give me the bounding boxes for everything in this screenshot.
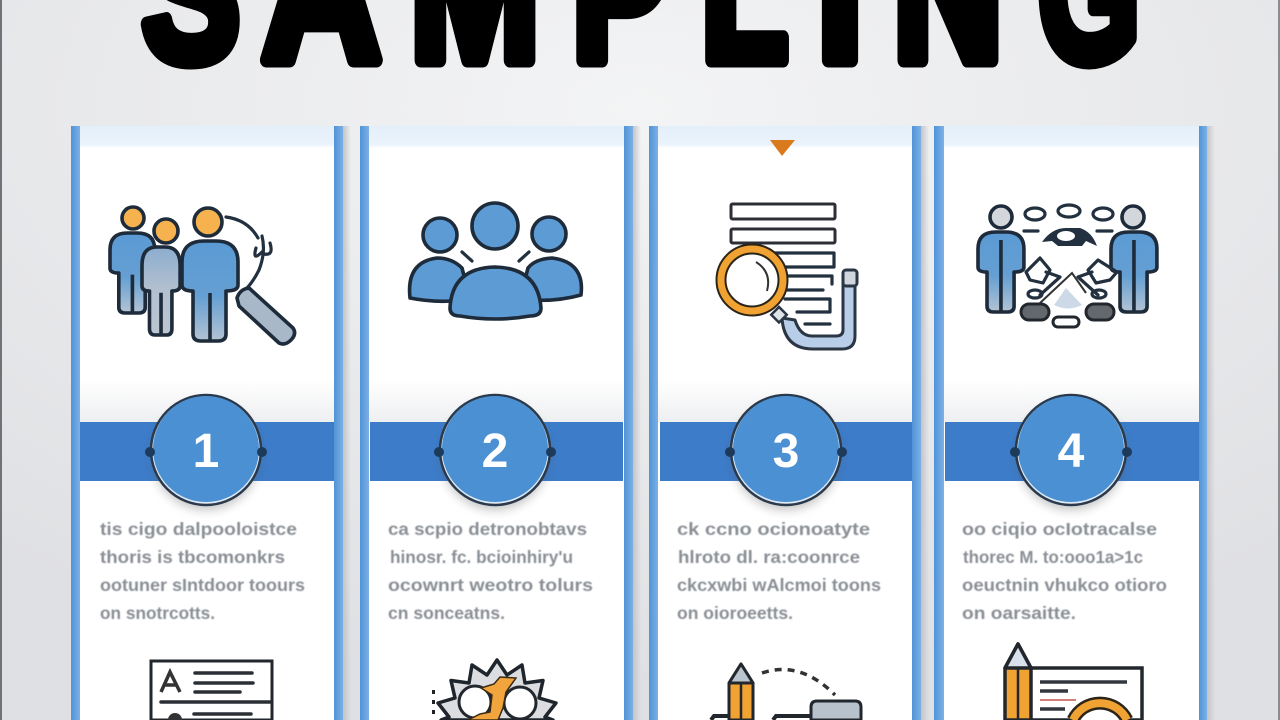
text block 3: ck ccno ocionoatyte	[677, 519, 870, 539]
text block 4	[962, 519, 1167, 623]
icon: gear	[432, 660, 556, 720]
number badge 1: 1	[193, 425, 219, 478]
text block 4: on oarsaitte.	[962, 603, 1076, 623]
text block 4: oeuctnin vhukco otioro	[962, 575, 1167, 595]
icon: list with magnifier	[721, 204, 857, 349]
number badge 3	[725, 395, 847, 510]
panel: step 1	[71, 126, 351, 720]
number badge 2	[434, 395, 556, 510]
icon: people with magnifier	[110, 207, 295, 344]
text block 1: on snotrcotts.	[100, 603, 215, 623]
icon: people discussing	[978, 205, 1157, 327]
text block 3: hlroto dl. ra:coonrce	[678, 547, 860, 567]
number badge 2: 2	[482, 425, 508, 478]
text block 3	[677, 519, 881, 623]
text block 2: hinosr. fc. bcioinhiry'u	[390, 547, 573, 567]
icon: pencil and folder	[711, 664, 861, 720]
text block 2: ca scpio detronobtavs	[388, 519, 587, 539]
panel: step 3	[649, 126, 929, 720]
panel: step 2	[360, 126, 641, 720]
text block 4: thorec M. to:ooo1a>1c	[963, 547, 1143, 567]
text block 4: oo ciqio ocIotracalse	[962, 519, 1157, 539]
text block 1	[100, 519, 305, 623]
text block 2: cn sonceatns.	[388, 603, 505, 623]
number badge 4: 4	[1058, 425, 1085, 478]
icon: group of people	[410, 203, 581, 319]
number badge 3: 3	[773, 425, 799, 478]
icon: document list	[151, 661, 272, 720]
panel: step 4	[934, 126, 1215, 720]
marker: orange triangle	[770, 140, 795, 156]
number badge 1	[145, 395, 267, 510]
text block 1: tis cigo dalpooloistce	[100, 519, 297, 539]
title	[142, 0, 1140, 103]
number badge 4	[1010, 395, 1132, 510]
text block 3: ckcxwbi wAlcmoi toons	[677, 575, 881, 595]
text block 2	[388, 519, 593, 623]
text block 3: on oioroeetts.	[677, 603, 793, 623]
icon: pencil, document and magnifier	[1005, 644, 1142, 720]
text block 1: thoris is tbcomonkrs	[100, 547, 285, 567]
text block 2: ocownrt weotro tolurs	[388, 575, 593, 595]
text block 1: ootuner sIntdoor toours	[100, 575, 305, 595]
